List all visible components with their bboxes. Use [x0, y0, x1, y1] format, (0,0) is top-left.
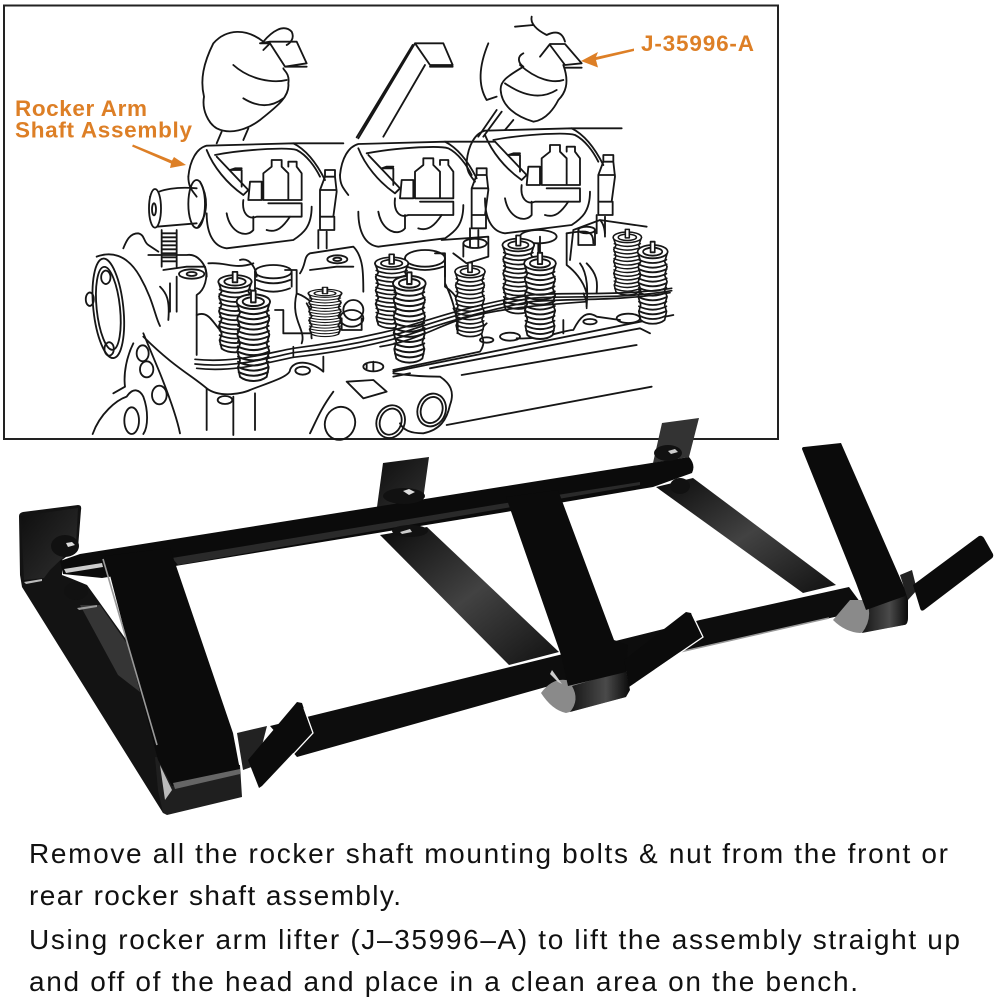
front blade centre	[506, 490, 630, 713]
back mounting plates	[377, 418, 699, 507]
front blade left	[103, 548, 242, 815]
label: Rocker Arm Shaft Assembly: Rocker Arm	[15, 96, 147, 121]
front blade right	[802, 443, 917, 633]
photo: rocker arm lifter tool	[19, 418, 993, 815]
valve springs	[218, 229, 668, 381]
instruction text: and off of the head and place in a clean area on the bench.	[29, 966, 858, 997]
rocker arm assemblies	[188, 128, 622, 248]
instruction text: rear rocker shaft assembly.	[29, 880, 401, 911]
cylinder head block	[86, 220, 673, 444]
instruction text: Using rocker arm lifter (J–35996–A) to lift the assembly straight up	[29, 924, 960, 955]
flip tab right	[913, 536, 993, 611]
arrow: to J-35996-A tool	[581, 48, 634, 68]
weld beads	[51, 445, 690, 600]
label: J-35996-A: J-35996-A	[641, 31, 754, 56]
arrow: to rocker arm shaft	[132, 144, 186, 168]
front bar	[237, 587, 866, 770]
instruction text: Remove all the rocker shaft mounting bolts & nut from the front or	[29, 838, 948, 869]
left bracket and angled arm	[19, 505, 170, 813]
panel: engine diagram	[4, 6, 778, 444]
label: Rocker Arm Shaft Assembly: Shaft Assembly	[15, 118, 192, 142]
icon: right hand holding lifter	[478, 17, 582, 137]
end cylinder and threaded bolt	[149, 180, 206, 267]
cross rod	[60, 457, 693, 578]
flip tab left	[248, 702, 313, 788]
icon: centre lifter tool	[357, 43, 453, 138]
wire harness	[195, 288, 672, 369]
back arms	[380, 478, 836, 665]
flip tab centre	[624, 612, 703, 687]
engine line drawing	[86, 17, 673, 444]
instruction text	[29, 838, 960, 997]
icon: left hand holding lifter	[202, 28, 307, 143]
